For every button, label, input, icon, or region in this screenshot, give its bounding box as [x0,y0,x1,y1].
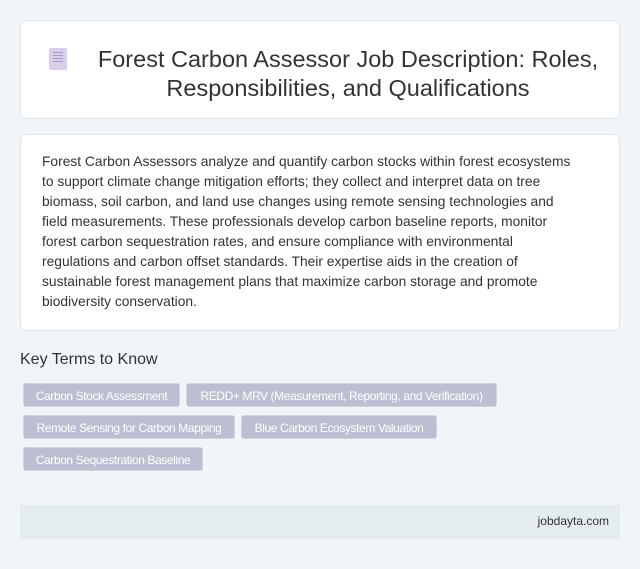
text block: description: biomass, soil carbon, and land use changes using remote sensing technologies and [42,194,554,209]
tag: Remote Sensing for Carbon Mapping [37,421,221,435]
footer: jobdayta.com [538,514,609,528]
heading: key terms: Key Terms to Know [20,351,158,368]
text block: description: Forest Carbon Assessors analyze and quantify carbon stocks within forest ecosystems [42,154,570,169]
tag: Carbon Stock Assessment [36,389,167,403]
tag [23,415,235,439]
text block: description: to support climate change mitigation efforts; they collect and interpret data on tree [42,174,540,189]
tag [186,383,497,407]
tag [23,447,203,471]
text block: description: field measurements. These professionals develop carbon baseline reports, monitor [42,214,547,229]
tag [23,383,180,407]
text block: description: sustainable forest management plans that maximize carbon storage and promote [42,274,537,289]
text block: description: regulations and carbon offset standards. Their expertise aids in the creation of [42,254,518,269]
tag: Blue Carbon Ecosystem Valuation [255,421,423,435]
icon: document [49,48,67,70]
text block: description [42,154,570,309]
tag: Carbon Sequestration Baseline [36,453,190,467]
title: Forest Carbon Assessor Job Description: Roles, Responsibilities, and Qualifications [98,46,598,101]
tag [241,415,437,439]
panel: header [20,20,620,119]
tag: REDD+ MRV (Measurement, Reporting, and Verification) [200,389,483,403]
text block: description: biodiversity conservation. [42,294,197,309]
footer [20,505,620,539]
text block: description: forest carbon sequestration rates, and ensure compliance with environmental [42,234,513,249]
panel: description [20,134,620,331]
